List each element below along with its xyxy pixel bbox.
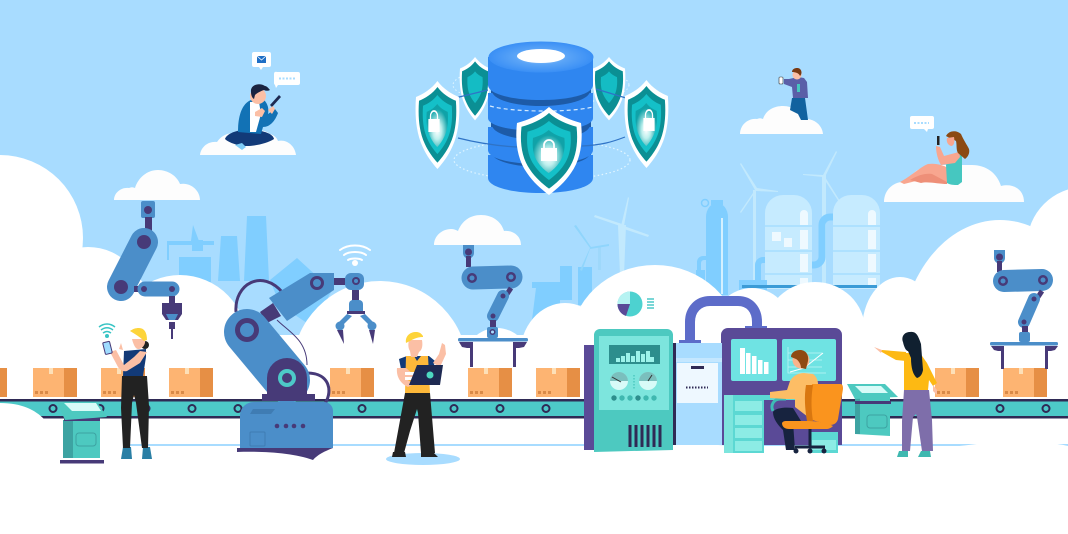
dotted chat bubble left: [274, 72, 300, 88]
back shield right: [593, 57, 625, 120]
right purple control cabinet: [721, 328, 842, 445]
front shield centre: [516, 107, 582, 195]
cloud above middle robot arm: [434, 215, 521, 245]
upper left robot arm: [114, 201, 182, 339]
conveyor belt: [0, 399, 1068, 419]
envelope chat bubble: [252, 52, 271, 70]
factory skyline left: [167, 216, 332, 327]
lower ground clouds: [320, 441, 1068, 534]
middle light blue machine column: [673, 343, 722, 445]
icon: data pie chart: [617, 292, 654, 316]
database with security shields: [416, 42, 668, 195]
back shield left: [460, 57, 490, 120]
screen: bar chart: [731, 339, 777, 381]
main white cloud bank: [0, 155, 1068, 534]
gauges: [610, 372, 657, 390]
ground line: [130, 444, 1068, 446]
cloud under standing man: [740, 106, 823, 134]
front shield left: [416, 81, 459, 169]
big blue robot arm: [235, 273, 376, 460]
seated man with phone: [225, 84, 281, 150]
database cylinder: [488, 42, 594, 193]
cloud under seated man: [200, 130, 296, 155]
sitting woman with phone: [900, 131, 969, 185]
right control console: [847, 384, 898, 436]
right robot arm with table: [990, 250, 1058, 369]
desk drawers: [724, 395, 838, 453]
factory skyline middle with wind turbines: [532, 197, 649, 320]
left teal server machine: [584, 329, 673, 452]
front shield right: [625, 80, 668, 168]
worker with helmet and laptop: [386, 332, 460, 465]
screen: line chart: [782, 339, 836, 381]
cardboard boxes on conveyor: [0, 368, 1047, 397]
woman with helmet and phone: [103, 328, 152, 459]
icon: teal wifi signal: [99, 324, 115, 338]
equalizer display: [609, 345, 660, 364]
woman pointing at screens: [874, 332, 937, 457]
connecting pipe: [679, 301, 767, 343]
cloud under sitting woman: [884, 165, 1024, 202]
cloud above left robot arm: [114, 170, 200, 200]
standing man with phone: [779, 68, 808, 120]
operator at desk in orange chair: [724, 350, 843, 454]
factory skyline right: tanks, cylinder, turbines: [696, 151, 880, 295]
icon: white wifi signal: [340, 246, 370, 266]
left control console: [57, 402, 107, 464]
middle robot arm with table: [458, 245, 528, 367]
dotted chat bubble right: [910, 116, 934, 132]
